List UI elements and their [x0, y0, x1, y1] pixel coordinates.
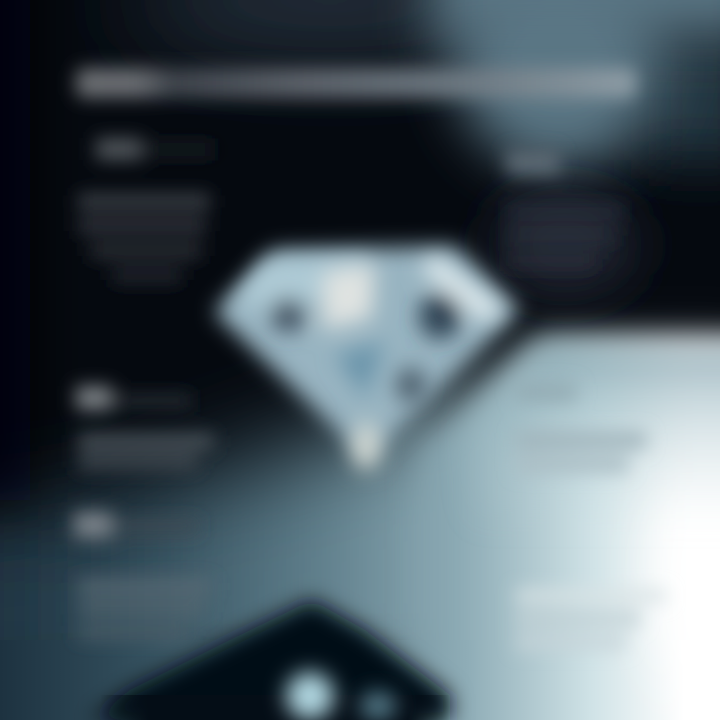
text block: top right	[506, 150, 624, 266]
diamond facets	[230, 256, 504, 470]
title	[76, 68, 636, 98]
text block: middle left	[76, 386, 214, 469]
text block: top left	[78, 138, 215, 282]
central diamond	[214, 246, 520, 470]
diamond body	[214, 246, 520, 460]
dark lower diamond	[90, 600, 450, 720]
text block: right lower	[516, 590, 666, 649]
text block: lower left	[74, 512, 212, 638]
text block: right middle	[516, 384, 646, 472]
